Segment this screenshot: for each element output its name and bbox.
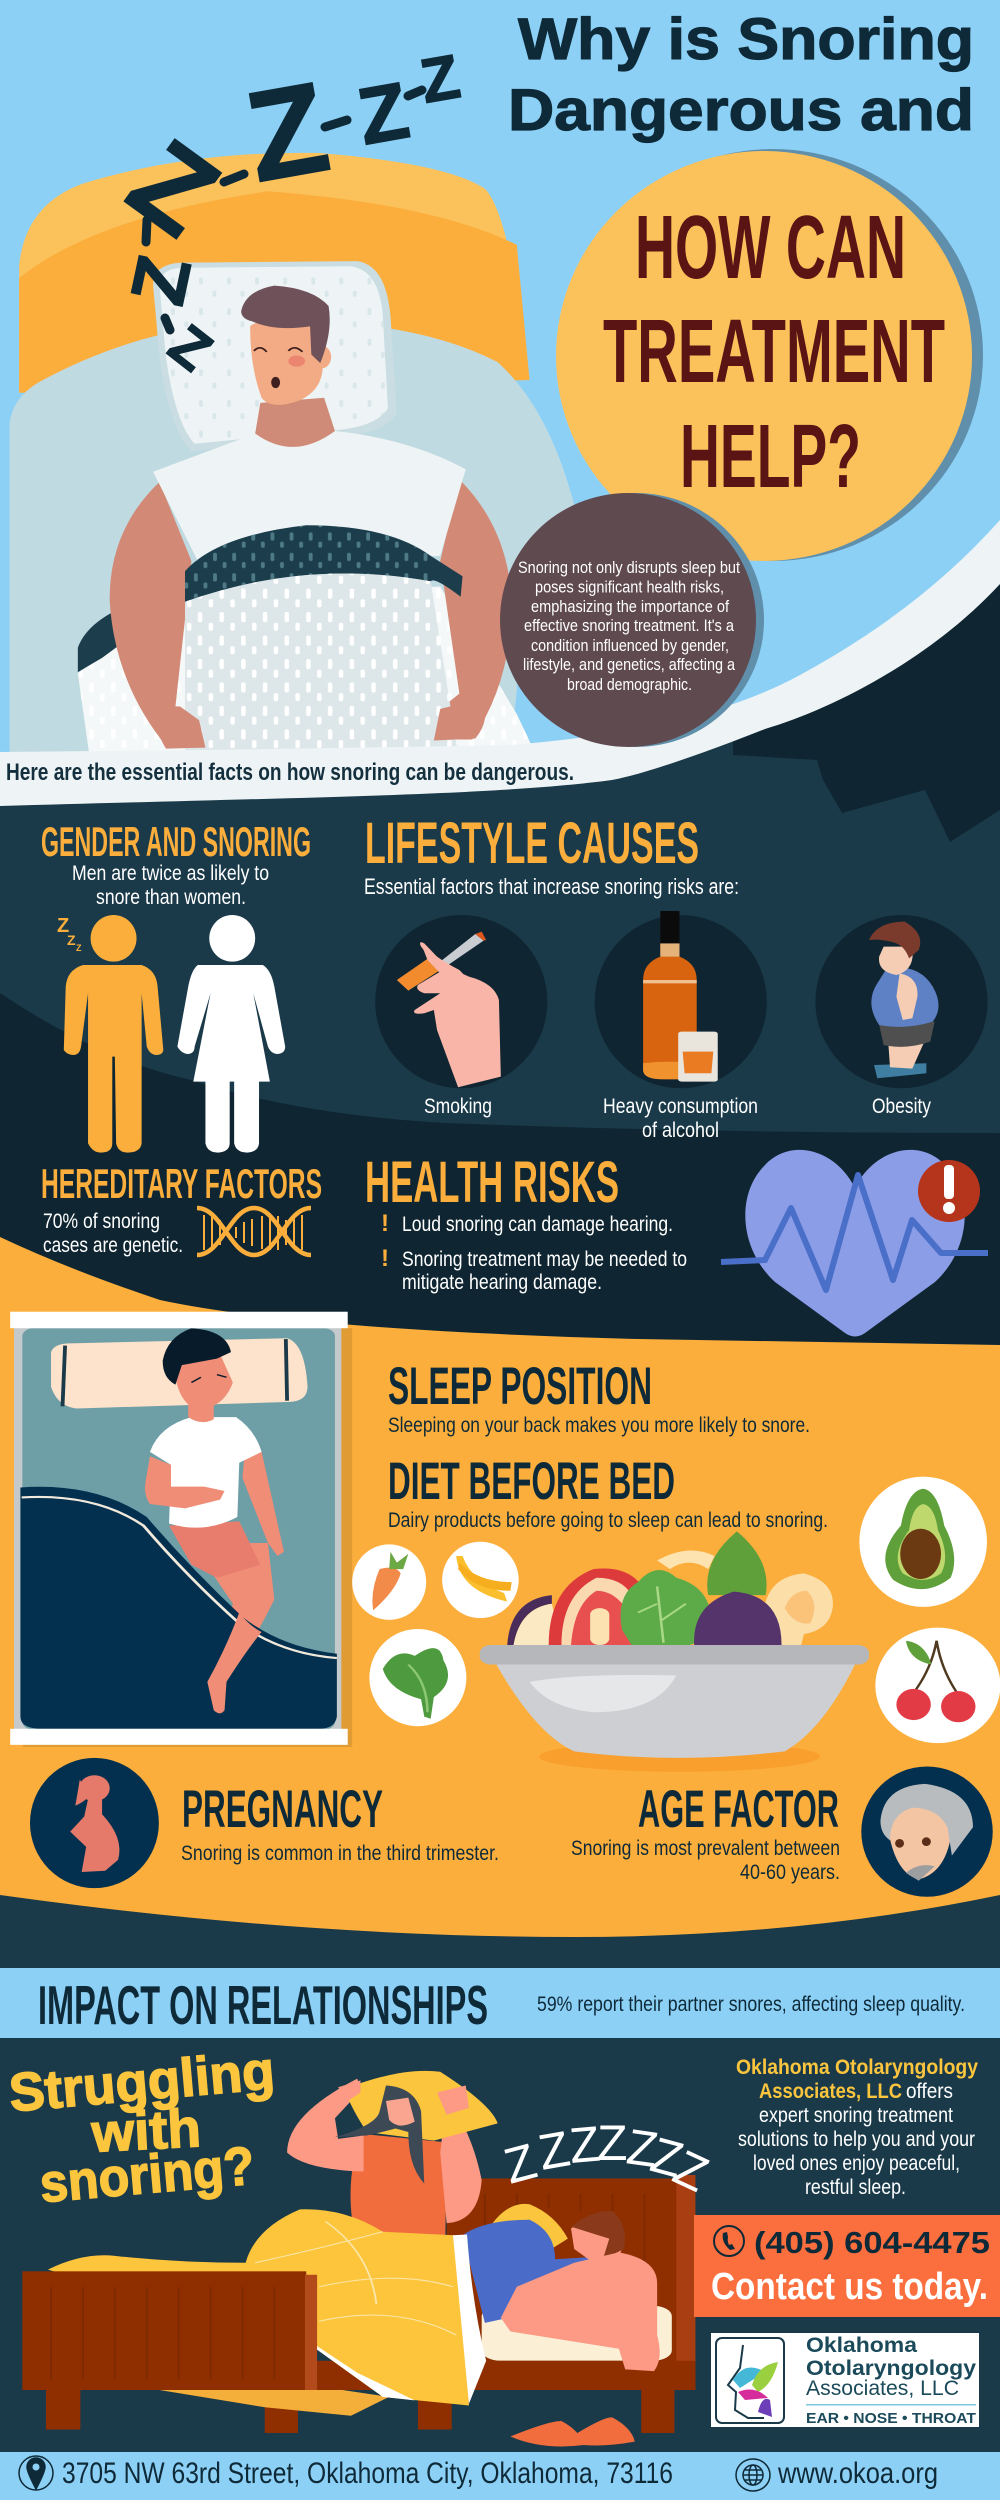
intro circle: Snoring not only disrupts sleep but [518,558,740,577]
address: 3705 NW 63rd Street, Oklahoma City, Oklahoma, 73116 [62,2457,673,2490]
intro circle: lifestyle, and genetics, affecting a [523,655,735,674]
hands [153,699,485,749]
bed bars [10,1312,348,1745]
small z: Z [158,312,224,383]
panel: health risks [365,1150,988,1336]
icon: globe [736,2459,770,2491]
heading: GENDER AND SNORING [41,818,311,865]
background: dark jagged corner [733,584,1000,842]
body text: 40-60 years. [740,1861,840,1884]
intro circle [500,493,764,747]
neck and head [163,1328,233,1422]
bullets: Loud snoring can damage hearing. [402,1213,673,1236]
swoosh: white band [0,520,1000,806]
icon: avocado [859,1477,987,1607]
bowl shadow [539,1741,820,1772]
icon: small z letters: Z [57,915,69,937]
hair [335,2086,424,2184]
neck [255,398,335,447]
yellow circle heading: HELP? [680,407,861,507]
heading: struggling with snoring [7,2041,277,2214]
bullets: mitigate hearing damage. [402,1271,602,1294]
snoring Z letters [107,42,465,383]
yellow circle heading [556,149,983,561]
arm left [145,1456,225,1508]
icon: banana [442,1542,519,1618]
lower blanket [78,576,536,755]
arm left [110,482,201,747]
mattress shadow [23,1328,352,1747]
heading: HEALTH RISKS [365,1150,619,1215]
labels: of alcohol [642,1119,719,1142]
blanket [48,2209,486,2405]
arm right [437,479,512,740]
labels [424,1095,931,1142]
footboard [22,2271,317,2390]
heading: struggling with snoring: Struggling [7,2041,277,2123]
title [508,7,974,143]
panel: practice description: offers [906,2080,953,2103]
title: Dangerous and [508,78,974,143]
body text: cases are genetic. [43,1234,183,1257]
icon: male and female figures [64,915,285,1153]
panel: sleep position [388,1357,810,1437]
logo text: EAR • NOSE • THROAT [806,2410,976,2427]
rear pillow [485,2204,568,2263]
heading: IMPACT ON RELATIONSHIPS [38,1974,488,2036]
panel: lifestyle causes [364,811,988,1142]
intro circle: broad demographic. [567,675,692,694]
logo text [806,2334,976,2427]
bullets [381,1210,687,1294]
hair [241,286,330,363]
icon: obesity [815,915,988,1088]
blanket [20,1487,337,1729]
background: lower dark panel [0,1880,1000,2452]
labels: Heavy consumption [603,1095,758,1118]
panel: practice description: Associates, LLC [759,2080,902,2103]
bowl [480,1645,869,1758]
shirt [153,431,466,561]
subheading: Essential factors that increase snoring risks are: [364,874,739,899]
labels: Smoking [424,1095,492,1118]
headboard [447,2175,695,2390]
body text: Dairy products before going to sleep can lead to snoring. [388,1509,828,1532]
arm right [440,2098,482,2223]
big z: Z [107,114,241,261]
dark blanket band [185,525,463,602]
icon: cherries [875,1628,1000,1743]
middle blanket [185,573,458,755]
heading: HEREDITARY FACTORS [41,1160,322,1207]
logo text: Associates, LLC [806,2377,959,2400]
illustration: couple in bed [22,2071,695,2446]
icon: small z letters: Z [67,932,76,948]
heading: SLEEP POSITION [388,1357,652,1416]
heading: PREGNANCY [182,1780,383,1839]
heading: struggling with snoring: with [89,2098,202,2164]
intro circle: poses significant health risks, [535,578,724,596]
panel: practice description [736,2056,978,2199]
panel: pregnancy [30,1758,499,1888]
icon: alcohol [595,911,767,1088]
headboard [19,153,530,393]
icon: nose profile [716,2338,784,2423]
icon: small z letters: Z [76,943,82,953]
panel: age factor [571,1767,993,1897]
icon: lettuce [369,1629,466,1726]
blanket tail [160,2387,389,2416]
vegetables in bowl [507,1531,833,1647]
heading: struggling with snoring: snoring? [37,2136,257,2214]
mattress [14,1326,341,1732]
mattress [482,2306,672,2361]
z: Z [115,249,208,312]
website: www.okoa.org [777,2457,938,2490]
panel: hereditary factors [41,1160,322,1257]
body text [72,862,269,909]
icon: carrot [352,1544,426,1620]
panel: practice description: expert snoring treatment [759,2104,953,2127]
callout: contact box [694,2215,1000,2317]
body text: 70% of snoring [43,1210,160,1233]
icon: heart with pulse and alert [721,1150,988,1336]
bullets: Snoring treatment may be needed to [402,1248,687,1271]
z: Z [416,42,465,117]
logo [711,2333,979,2427]
panel: practice description: loved ones enjoy peaceful, [753,2152,960,2175]
legs [191,1543,274,1713]
icon: phone [714,2226,744,2256]
snoring ZZZ text: ZZZZZZZ [498,2115,717,2203]
dashes [146,90,422,330]
background: dark panel [0,570,1000,1350]
icon: elderly man [861,1767,993,1897]
body text: Men are twice as likely to [72,862,269,885]
bed base [316,2361,695,2390]
bed legs [46,2388,674,2433]
icon: smoking [375,915,547,1088]
intro circle: condition influenced by gender, [531,636,729,655]
arm left [287,2079,364,2172]
pillow [153,261,397,451]
slippers [510,2417,635,2446]
arm right [242,1443,284,1556]
logo text: Oklahoma [806,2334,917,2357]
logo text: Otolaryngology [806,2357,976,2380]
panel: practice description: Oklahoma Otolaryngology [736,2056,978,2079]
background: orange panel [0,1237,1000,1937]
phone number: (405) 604-4475 [754,2225,990,2260]
body text [571,1837,840,1884]
band: impact on relationships [0,1968,1000,2038]
hands [338,2080,360,2101]
body text: Snoring is most prevalent between [571,1837,840,1860]
body text: Snoring is common in the third trimester. [181,1842,499,1865]
leg over blanket [207,1612,262,1713]
body text [43,1210,183,1257]
labels: Obesity [872,1095,931,1118]
heading: LIFESTYLE CAUSES [365,811,699,876]
illustration: man sleeping on back [10,1312,352,1747]
pillow [51,1338,308,1408]
face [386,2098,415,2126]
heading: DIET BEFORE BED [388,1452,675,1511]
bullets: ! [381,1210,389,1237]
background: darker wave [0,993,1000,1350]
heading: AGE FACTOR [638,1780,839,1839]
icon: pregnant woman [30,1758,159,1888]
intro line: Here are the essential facts on how snoring can be dangerous. [6,759,574,786]
title: Why is Snoring [518,7,974,72]
body text: Sleeping on your back makes you more likely to snore. [388,1414,810,1437]
footer band [0,2452,1000,2500]
icon: DNA helix [197,1208,311,1255]
bed body [10,321,574,755]
pillow over head [345,2071,498,2141]
dress [351,2134,447,2239]
icon: small z letters [57,915,82,953]
icon: location pin [19,2456,53,2490]
panel: gender and snoring [41,818,311,1153]
panel: practice description: restful sleep. [805,2176,906,2199]
woman [287,2071,498,2239]
bullets: ! [381,1245,389,1272]
illustration: food bowl and icons [352,1477,1000,1772]
intro circle: emphasizing the importance of [531,597,729,616]
face [250,319,331,405]
z: Z [351,65,415,162]
largest Z: Z [237,55,338,210]
panel: diet before bed [388,1452,828,1532]
body text: snore than women. [96,886,246,909]
illustration: sleeping man in bed [10,153,574,755]
shirt [150,1417,262,1528]
intro circle: effective snoring treatment. It's a [524,616,734,635]
man lying [463,2211,660,2371]
